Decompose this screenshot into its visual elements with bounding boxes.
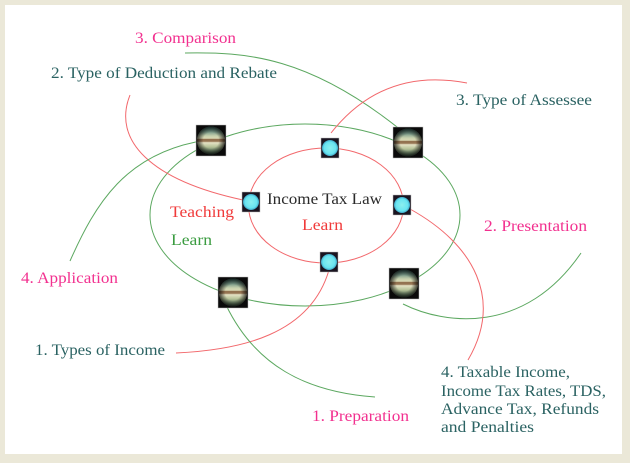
label: Learn red: Learn — [302, 217, 343, 234]
icon: planet top left — [196, 125, 226, 156]
connector: Comparison to planet — [185, 53, 407, 135]
icon: blue node bottom — [320, 252, 338, 272]
inner red orbit — [248, 148, 404, 263]
label: 4. Taxable Income block — [441, 364, 606, 436]
label: 1. Types of Income: 1. Types of Income — [35, 342, 165, 359]
label: 4. Taxable Income block: Advance Tax, Refunds — [441, 401, 599, 418]
outer green orbit — [150, 124, 460, 306]
label: 4. Taxable Income block: Income Tax Rates, TDS, — [441, 383, 606, 400]
label: 4. Taxable Income block: 4. Taxable Income, — [441, 364, 570, 381]
label: 2. Presentation: 2. Presentation — [484, 218, 587, 235]
label: 4. Taxable Income block: and Penalties — [441, 419, 534, 436]
label: 1. Preparation: 1. Preparation — [312, 408, 409, 425]
label: Learn green: Learn — [171, 232, 212, 249]
center title: Income Tax Law: Income Tax Law — [267, 191, 383, 208]
label: 3. Type of Assessee: 3. Type of Assessee — [456, 92, 592, 109]
connector: Deduction and Rebate to blue node — [126, 95, 243, 200]
label: 4. Application: 4. Application — [21, 270, 118, 287]
label: Teaching: Teaching — [170, 204, 234, 221]
connector: Application to planet — [70, 140, 207, 261]
icon: blue node top — [321, 138, 339, 158]
connector: Presentation to planet — [403, 253, 581, 319]
connector: Taxable Income to blue node — [410, 209, 483, 360]
icon: planet bottom right — [389, 268, 419, 299]
icon: blue node right — [393, 195, 411, 215]
icon: planet top right — [393, 127, 423, 158]
connector: Preparation to planet — [226, 305, 375, 397]
label: 3. Comparison: 3. Comparison — [135, 30, 236, 47]
label: 2. Type of Deduction and Rebate: 2. Type of Deduction and Rebate — [51, 65, 277, 82]
icon: blue node left — [242, 192, 260, 212]
icon: planet bottom left — [218, 277, 248, 308]
connector: Type of Assessee to blue node — [331, 80, 467, 133]
connector: Types of Income to blue node — [176, 270, 329, 353]
